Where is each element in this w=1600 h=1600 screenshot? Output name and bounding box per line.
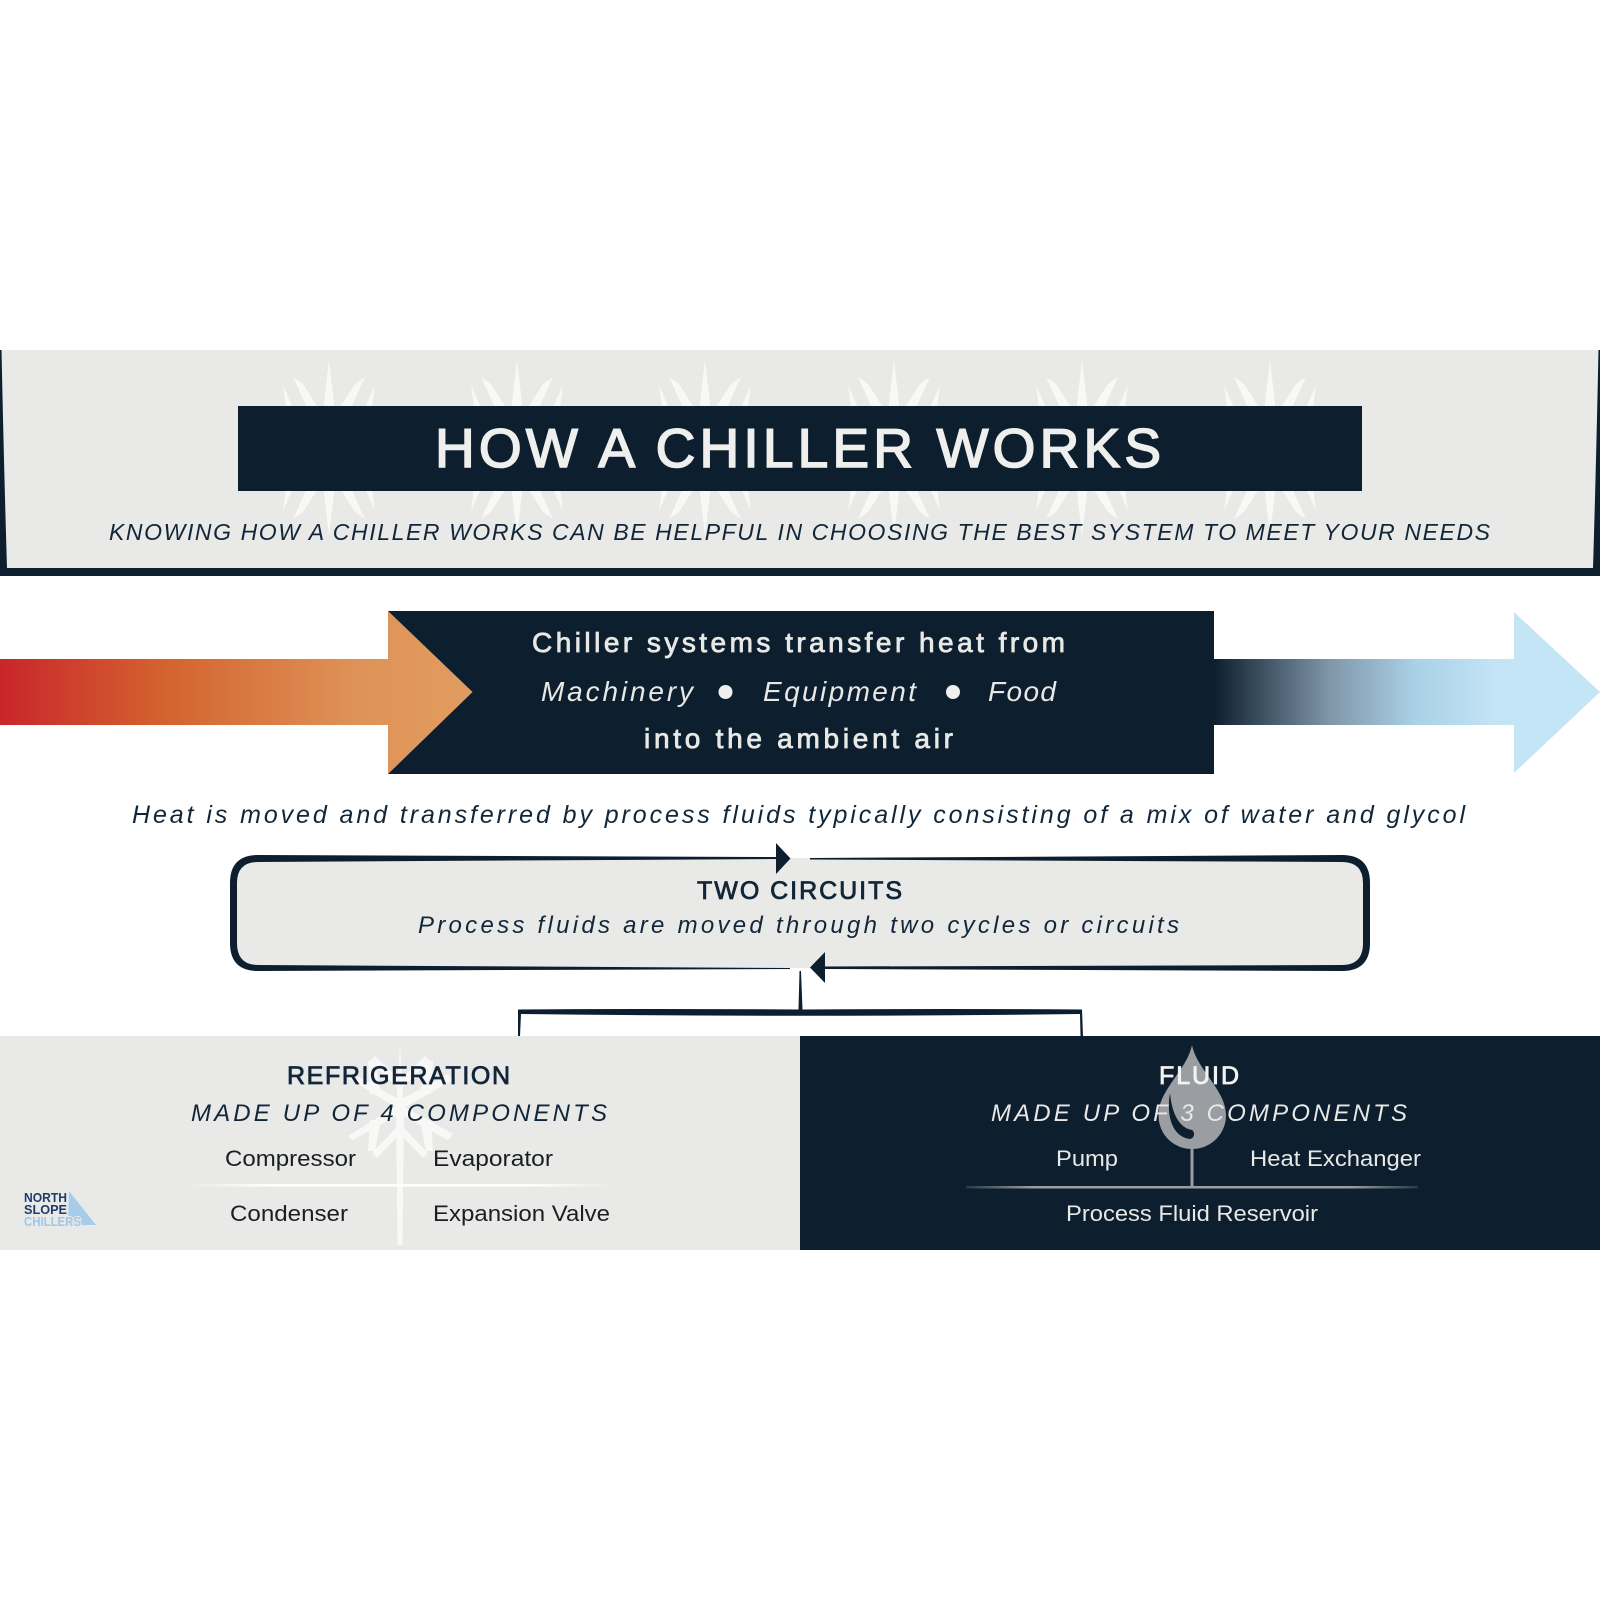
- two circuits description: Process fluids are moved through two cycles or circuits: [418, 912, 1179, 939]
- statement line 1: Chiller systems transfer heat from: [532, 627, 1065, 658]
- logo word slope: SLOPE: [24, 1203, 67, 1217]
- divider line: [183, 1184, 617, 1186]
- bullet: [946, 685, 960, 699]
- connector bracket: [518, 971, 1083, 1036]
- divider line: [966, 1186, 1418, 1188]
- component: compressor: Compressor: [225, 1146, 357, 1171]
- logo: north slope chillers: [24, 1191, 96, 1229]
- component: process fluid reservoir: Process Fluid Reservoir: [1066, 1201, 1319, 1226]
- component: expansion valve: Expansion Valve: [433, 1201, 610, 1226]
- logo triangle: [68, 1191, 96, 1225]
- label: machinery: Machinery: [541, 676, 695, 707]
- label: food: Food: [988, 676, 1057, 707]
- component: evaporator: Evaporator: [433, 1146, 554, 1171]
- title: HOW A CHILLER WORKS: [435, 417, 1161, 479]
- snowflake icon: [348, 1043, 453, 1245]
- panel: header: [0, 350, 1600, 576]
- two circuits heading: TWO CIRCUITS: [697, 877, 902, 905]
- bullet: [718, 685, 732, 699]
- water drop icon: [1158, 1045, 1226, 1187]
- circuit loop left: [230, 855, 790, 971]
- process fluids text: Heat is moved and transferred by process fluids typically consisting of a mix of water and glycol: [132, 801, 1466, 829]
- arrow: circuit top: [776, 843, 790, 874]
- component: heat exchanger: Heat Exchanger: [1250, 1146, 1422, 1171]
- statement line 3: into the ambient air: [644, 723, 953, 754]
- refrigeration subheading: MADE UP OF 4 COMPONENTS: [191, 1100, 607, 1127]
- circuit loop right: [810, 855, 1370, 971]
- logo word chillers: CHILLERS: [24, 1215, 81, 1229]
- component: condenser: Condenser: [230, 1201, 349, 1226]
- fluid subheading: MADE UP OF 3 COMPONENTS: [991, 1100, 1407, 1127]
- panel: refrigeration: [0, 1036, 800, 1250]
- subtitle: KNOWING HOW A CHILLER WORKS CAN BE HELPFUL IN CHOOSING THE BEST SYSTEM TO MEET YOUR NEEDS: [109, 519, 1491, 545]
- refrigeration heading: REFRIGERATION: [287, 1062, 510, 1090]
- fluid heading: FLUID: [1159, 1062, 1239, 1090]
- header snowflake pattern: [283, 360, 1316, 536]
- panel: heat transfer statement: [388, 611, 1214, 774]
- label: equipment: Equipment: [763, 676, 917, 707]
- title bar: [238, 406, 1362, 491]
- arrow: circuit bottom: [810, 952, 825, 983]
- arrow: heat out (navy to light blue): [1214, 612, 1600, 773]
- panel: two circuits: [230, 843, 1370, 983]
- arrow: heat in (red to orange): [0, 611, 472, 774]
- panel: fluid: [800, 1036, 1600, 1250]
- header navy border: [0, 350, 1600, 576]
- component: pump: Pump: [1056, 1146, 1118, 1171]
- logo word north: NORTH: [24, 1191, 67, 1205]
